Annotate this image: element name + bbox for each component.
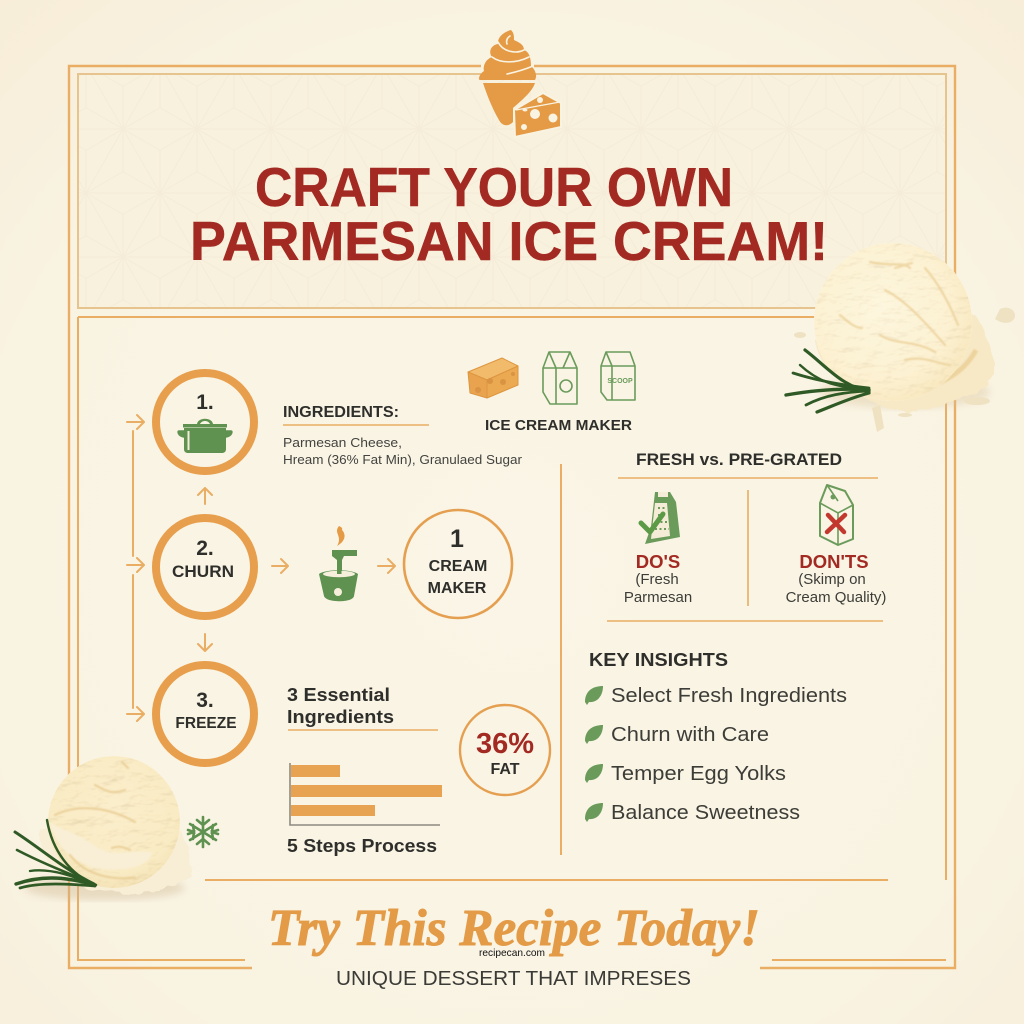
don'ts text: DON'TS [799,551,869,572]
label: ice cream maker: ICE CREAM MAKER [485,418,633,434]
step 1 [156,373,254,471]
photo: ice cream scoop top right [786,243,1015,432]
don'ts text: Cream Quality) [786,589,886,606]
flow connector lines and arrows [127,415,395,721]
icon: snowflake [188,817,218,847]
callout: 36% fat: 36% [476,728,534,760]
icon: milk carton right [601,352,635,400]
icon: rosemary sprig bottom [15,820,96,888]
icon: carton with cross [820,485,853,545]
step 2 [156,518,254,616]
heading: 3 essential ingredients [287,684,438,730]
heading: 3 essential ingredients: 3 Essential [287,684,390,705]
do's text: DO'S [636,551,680,572]
icon: grater with check [641,492,680,544]
do's text: Parmesan [624,589,692,606]
header patterned panel [79,75,946,308]
title [190,156,828,272]
step 1: 1. [196,391,214,414]
icon: pot [178,419,232,453]
footer tagline: UNIQUE DESSERT THAT IMPRESES [336,967,691,990]
icon: milk carton right: SCOOP [607,378,633,385]
ingredients text block [283,404,523,467]
icon: churn machine [319,526,358,601]
panel: key insights: KEY INSIGHTS [589,650,728,670]
heading: 3 essential ingredients: Ingredients [287,706,394,727]
callout: 1 cream maker: CREAM [429,558,487,575]
ingredients text block: Hream (36% Fat Min), Granulaed Sugar [283,452,523,467]
panel: key insights [585,650,847,824]
footer call to action: Try This Recipe Today! [268,900,760,957]
callout: 1 cream maker: MAKER [428,580,487,597]
chart caption: 5 Steps Process [287,835,437,856]
icon: rosemary sprig top [786,350,869,412]
column divider [560,464,562,855]
watermark: recipecan.com [479,947,545,959]
insight 3: Temper Egg Yolks [611,763,786,785]
step 3: 3. [196,689,214,712]
callout: 36% fat [460,705,550,795]
decorative frame lines [69,66,955,968]
bar chart [290,763,442,825]
photo: ice cream scoop bottom left [15,756,192,900]
ingredients text block: INGREDIENTS: [283,404,399,421]
don'ts text [786,551,886,606]
icon: ice cream swirl with cheese [479,30,561,137]
callout: 1 cream maker: 1 [450,525,464,553]
step 3 [156,665,254,763]
panel: fresh vs pre-grated [607,451,886,621]
do's text [624,551,692,606]
insight 4: Balance Sweetness [611,802,800,824]
callout: 36% fat: FAT [490,761,520,778]
do's text: (Fresh [635,571,679,588]
don'ts text: (Skimp on [798,571,866,588]
step 2: 2. [196,537,214,560]
ingredients text block: Parmesan Cheese, [283,435,402,450]
insight 1: Select Fresh Ingredients [611,685,847,707]
title: PARMESAN ICE CREAM! [190,210,828,272]
icon: cheese block [468,358,518,398]
step 3: FREEZE [175,715,237,732]
panel: fresh vs pre-grated: FRESH vs. PRE-GRATED [636,451,842,469]
insight 2: Churn with Care [611,724,769,746]
title: CRAFT YOUR OWN [255,156,733,218]
callout: 1 cream maker [404,510,512,618]
step 2: CHURN [172,562,234,581]
icon: milk carton left [543,352,577,404]
